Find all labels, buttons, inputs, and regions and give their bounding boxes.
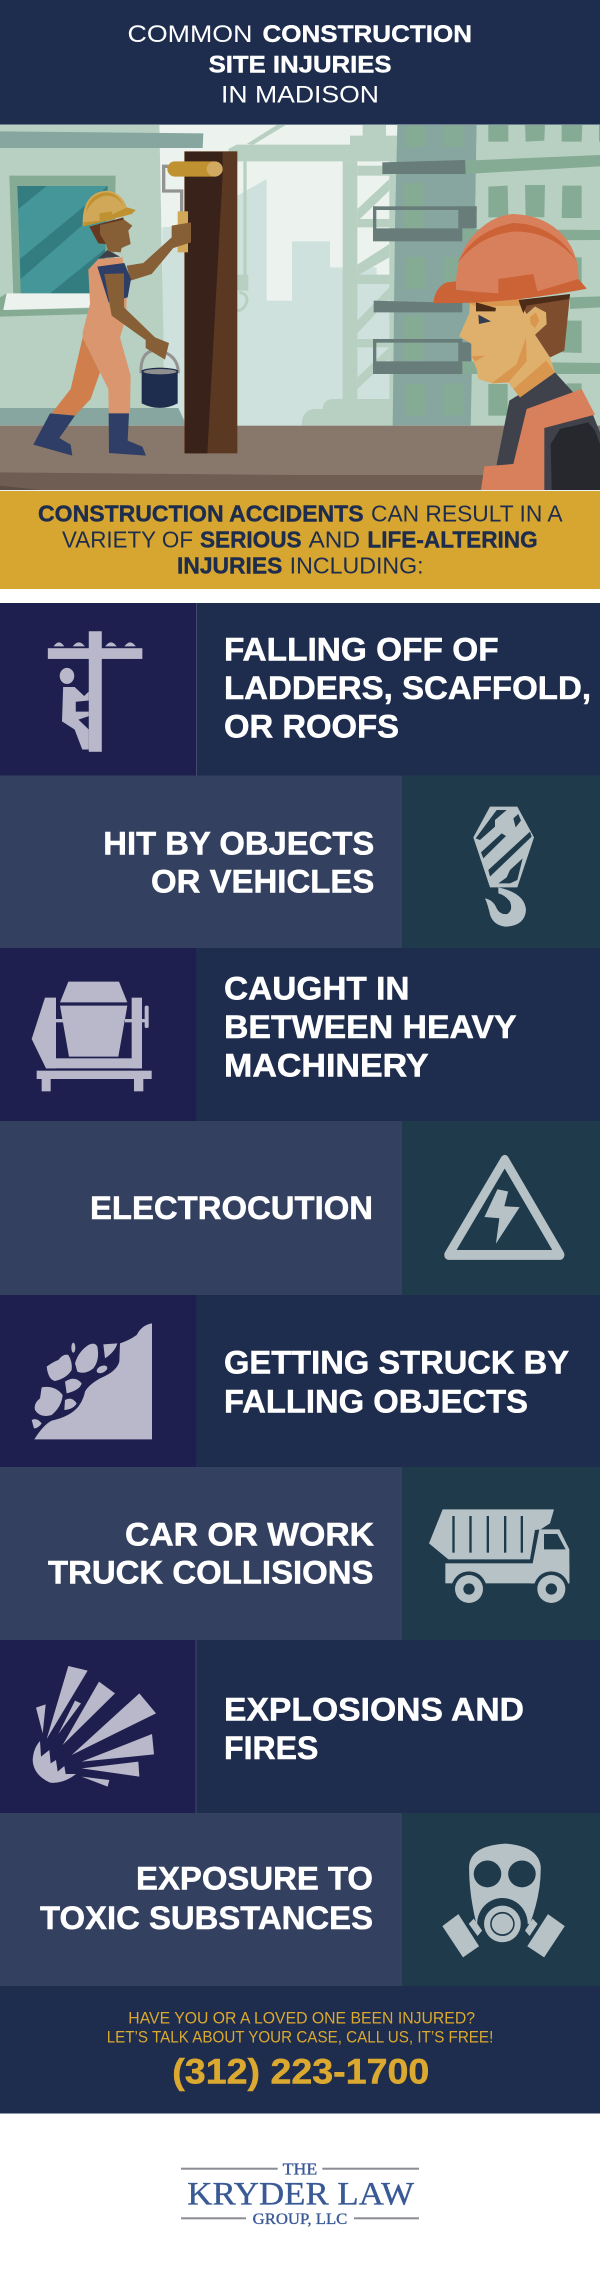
illustration: construction workers at a building site: [0, 124, 600, 491]
intro text: AND: [308, 527, 360, 553]
row 3: caught in machinery: [0, 948, 600, 1121]
label: LADDERS, SCAFFOLD,: [224, 670, 591, 706]
wooden post: [184, 151, 237, 453]
cta text: [107, 2008, 493, 2046]
row 8: toxic substances: [0, 1813, 600, 1986]
left half: worker painting a post: [0, 124, 300, 490]
intro text: INJURIES: [177, 553, 282, 579]
intro text: [38, 501, 563, 579]
logo: The Kryder Law Group, LLC: KRYDER LAW: [187, 2176, 415, 2212]
label: GETTING STRUCK BY: [224, 1344, 569, 1380]
gold intro banner: [0, 491, 600, 589]
logo: The Kryder Law Group, LLC: THE: [283, 2159, 317, 2178]
label: TOXIC SUBSTANCES: [40, 1900, 373, 1936]
label: OR VEHICLES: [151, 863, 374, 899]
label: FALLING OFF OF: [224, 631, 499, 667]
cta text: LET’S TALK ABOUT YOUR CASE, CALL US, IT’S FREE!: [107, 2027, 493, 2046]
label: MACHINERY: [224, 1047, 429, 1083]
phone number: (312) 223-1700: [172, 2052, 429, 2091]
title: SITE INJURIES: [209, 52, 392, 79]
intro text: VARIETY OF: [62, 527, 193, 553]
row 6: truck collisions: [0, 1467, 600, 1640]
label: FALLING OBJECTS: [224, 1383, 528, 1419]
label: [224, 1344, 569, 1419]
scaffolding: [373, 160, 477, 374]
label: BETWEEN HEAVY: [224, 1009, 517, 1045]
icon: dump truck: [429, 1509, 569, 1607]
title: CONSTRUCTION: [262, 21, 472, 48]
label: [48, 1516, 374, 1590]
label: CAUGHT IN: [224, 970, 410, 1006]
right half: background buildings and worker in orange hard hat: [300, 124, 600, 490]
intro text: CONSTRUCTION ACCIDENTS: [38, 501, 364, 527]
intro text: CAN RESULT IN A: [371, 501, 563, 527]
label: [224, 631, 591, 744]
logo: The Kryder Law Group, LLC: GROUP, LLC: [253, 2211, 347, 2228]
call-to-action footer: [0, 1986, 600, 2114]
label: FIRES: [224, 1730, 318, 1766]
icon: crane hook: [473, 807, 534, 927]
intro text: SERIOUS: [200, 527, 302, 553]
intro text: LIFE-ALTERING: [367, 527, 538, 553]
label: [224, 970, 517, 1083]
row 5: falling objects: [0, 1295, 600, 1467]
icon: worker climbing utility pole: [48, 631, 142, 752]
title: [128, 21, 472, 108]
row 1: falling: [0, 603, 600, 776]
logo: The Kryder Law Group, LLC: [181, 2159, 419, 2228]
label: HIT BY OBJECTS: [103, 826, 374, 862]
row 4: electrocution: [0, 1121, 600, 1295]
icon: explosion: [33, 1666, 156, 1787]
label: OR ROOFS: [224, 708, 399, 744]
worker in orange hard hat: [433, 214, 600, 490]
label: [40, 1861, 373, 1936]
row 7: explosions: [0, 1640, 600, 1813]
label: [224, 1691, 524, 1766]
label: EXPLOSIONS AND: [224, 1691, 524, 1727]
label: TRUCK COLLISIONS: [48, 1554, 374, 1590]
label: CAR OR WORK: [125, 1516, 374, 1552]
icon: cement mixer: [32, 982, 152, 1091]
title: IN MADISON: [221, 82, 379, 108]
label: EXPOSURE TO: [136, 1861, 373, 1897]
worker with bucket: [33, 191, 191, 456]
icon: electrical hazard triangle: [448, 1160, 560, 1255]
label: ELECTROCUTION: [90, 1190, 373, 1226]
window: [0, 176, 116, 317]
icon: rockslide: [32, 1323, 152, 1439]
header banner: [0, 0, 600, 124]
icon: gas mask: [442, 1844, 565, 1957]
cta text: HAVE YOU OR A LOVED ONE BEEN INJURED?: [128, 2008, 475, 2027]
intro text: INCLUDING:: [290, 553, 424, 579]
paint roller: [164, 161, 223, 252]
row 2: hit by objects: [0, 776, 600, 948]
title: COMMON: [128, 21, 252, 48]
label: [103, 826, 374, 899]
